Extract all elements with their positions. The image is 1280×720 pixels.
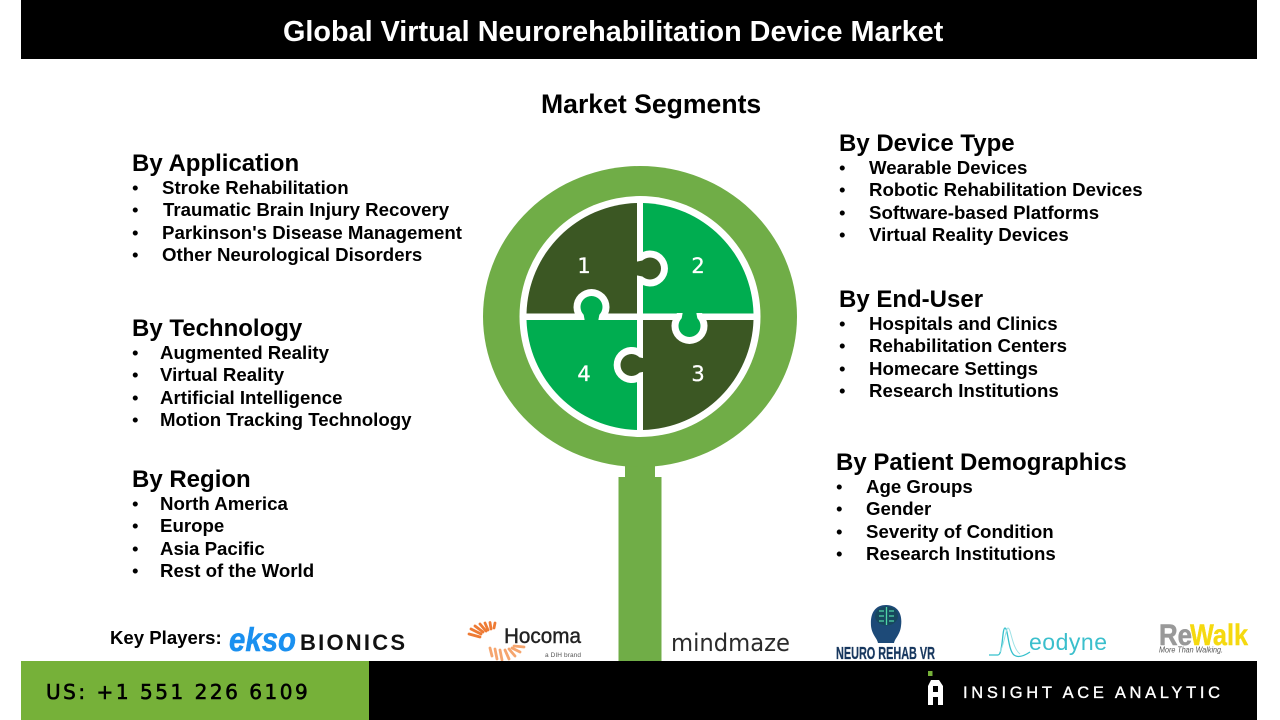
list: device type items: •	[839, 202, 846, 223]
list: application items: •	[132, 177, 139, 198]
puzzle piece 2: 2	[691, 254, 705, 278]
list: technology items: Augmented Reality	[160, 342, 329, 363]
panel: by device type	[839, 130, 1143, 245]
panel: by patient demographics	[836, 449, 1127, 564]
list: device type items	[839, 157, 1143, 245]
list: application items	[132, 177, 462, 265]
list: application items: •	[132, 222, 139, 243]
logo: rewalk: More Than Walking.	[1159, 644, 1223, 654]
logo: hocoma: a DIH brand	[545, 652, 581, 659]
panel: by end-user	[839, 286, 1067, 401]
puzzle tab: piece 3 into 4	[614, 347, 645, 383]
panel: by technology	[132, 315, 412, 430]
logo: eodyne: eodyne	[1029, 629, 1107, 655]
puzzle tab: piece 2 into 3	[672, 311, 708, 344]
logo: ekso bionics: BIONICS	[300, 630, 405, 655]
list: technology items: •	[132, 387, 139, 408]
heading: by end-user: By End-User	[839, 286, 983, 313]
heading: by device type: By Device Type	[839, 130, 1015, 157]
list: region items: •	[132, 538, 139, 559]
magnifier handle	[618, 460, 662, 661]
brand: insight ace analytic: INSIGHT ACE ANALYTIC	[963, 684, 1220, 702]
subtitle: market segments: Market Segments	[541, 89, 761, 119]
list: application items: Traumatic Brain Injury Recovery	[163, 199, 449, 220]
heading: by application: By Application	[132, 150, 299, 177]
puzzle piece 1	[526, 203, 637, 314]
list: end-user items: •	[839, 335, 846, 356]
list: application items: Other Neurological Disorders	[162, 244, 422, 265]
list: region items: •	[132, 493, 139, 514]
list: patient demographics items: Gender	[866, 498, 931, 519]
list: patient demographics items: Age Groups	[866, 476, 973, 497]
list: technology items: Virtual Reality	[160, 364, 284, 385]
puzzle piece 1: 1	[577, 254, 591, 278]
logo: mindmaze: mindmaze	[671, 629, 790, 657]
list: device type items: Wearable Devices	[869, 157, 1027, 178]
list: patient demographics items: •	[836, 476, 843, 497]
list: technology items	[132, 342, 412, 430]
list: region items: Rest of the World	[160, 560, 314, 581]
list: region items	[132, 493, 314, 581]
logo: ekso bionics: ekso	[229, 621, 296, 658]
list: end-user items	[839, 313, 1067, 401]
icon: head with brain	[871, 605, 901, 643]
list: device type items: •	[839, 157, 846, 178]
list: patient demographics items: Severity of Condition	[866, 521, 1054, 542]
list: region items: •	[132, 515, 139, 536]
footer: black bar	[369, 661, 1257, 720]
header bar	[21, 0, 1257, 59]
list: application items: Parkinson's Disease Management	[162, 222, 462, 243]
title: Global Virtual Neurorehabilitation Device Market	[283, 16, 943, 48]
list: technology items: •	[132, 409, 139, 430]
logo: neuro rehab vr	[836, 605, 935, 662]
list: technology items: •	[132, 342, 139, 363]
list: technology items: Motion Tracking Technology	[160, 409, 412, 430]
list: patient demographics items: •	[836, 498, 843, 519]
puzzle tab: piece 4 into 1	[574, 289, 610, 322]
logo: hocoma: Hocoma	[504, 625, 581, 648]
list: device type items: Software-based Platforms	[869, 202, 1099, 223]
list: device type items: Virtual Reality Devices	[869, 224, 1069, 245]
puzzle piece 3	[643, 320, 754, 430]
logo: rewalk: Re	[1159, 619, 1192, 652]
list: application items: •	[132, 199, 139, 220]
panel: by region	[132, 466, 314, 581]
heading: by technology: By Technology	[132, 315, 302, 342]
list: technology items: Artificial Intelligence	[160, 387, 342, 408]
list: region items: Asia Pacific	[160, 538, 265, 559]
magnifier ring	[483, 166, 797, 467]
footer: phone panel	[21, 661, 369, 720]
list: end-user items: Hospitals and Clinics	[869, 313, 1058, 334]
list: end-user items: Homecare Settings	[869, 358, 1038, 379]
list: technology items: •	[132, 364, 139, 385]
logo: rewalk	[1159, 619, 1248, 654]
label: key players: Key Players:	[110, 627, 222, 648]
list: application items: •	[132, 244, 139, 265]
icon: insight ace logo	[928, 671, 943, 705]
list: end-user items: Rehabilitation Centers	[869, 335, 1067, 356]
list: application items: Stroke Rehabilitation	[162, 177, 349, 198]
puzzle piece 4: 4	[577, 362, 591, 386]
puzzle piece 4	[526, 320, 637, 430]
puzzle tab: piece 1 into 2	[635, 251, 668, 286]
list: region items: Europe	[160, 515, 224, 536]
list: device type items: •	[839, 224, 846, 245]
list: end-user items: Research Institutions	[869, 380, 1059, 401]
list: region items: •	[132, 560, 139, 581]
list: end-user items: •	[839, 380, 846, 401]
list: end-user items: •	[839, 358, 846, 379]
puzzle piece 3: 3	[691, 362, 705, 386]
heading: by patient demographics: By Patient Demographics	[836, 449, 1127, 476]
list: device type items: Robotic Rehabilitation Devices	[869, 179, 1143, 200]
logo: hocoma	[468, 621, 582, 661]
list: patient demographics items: •	[836, 543, 843, 564]
puzzle piece 2	[643, 203, 754, 314]
logo: ekso bionics	[229, 621, 405, 658]
list: device type items: •	[839, 179, 846, 200]
list: patient demographics items: Research Institutions	[866, 543, 1056, 564]
list: patient demographics items	[836, 476, 1056, 564]
heading: by region: By Region	[132, 466, 251, 493]
list: end-user items: •	[839, 313, 846, 334]
logo: eodyne	[989, 627, 1107, 658]
list: patient demographics items: •	[836, 521, 843, 542]
list: region items: North America	[160, 493, 288, 514]
phone number: US: +1 551 226 6109	[46, 680, 310, 704]
panel: by application	[132, 150, 462, 265]
